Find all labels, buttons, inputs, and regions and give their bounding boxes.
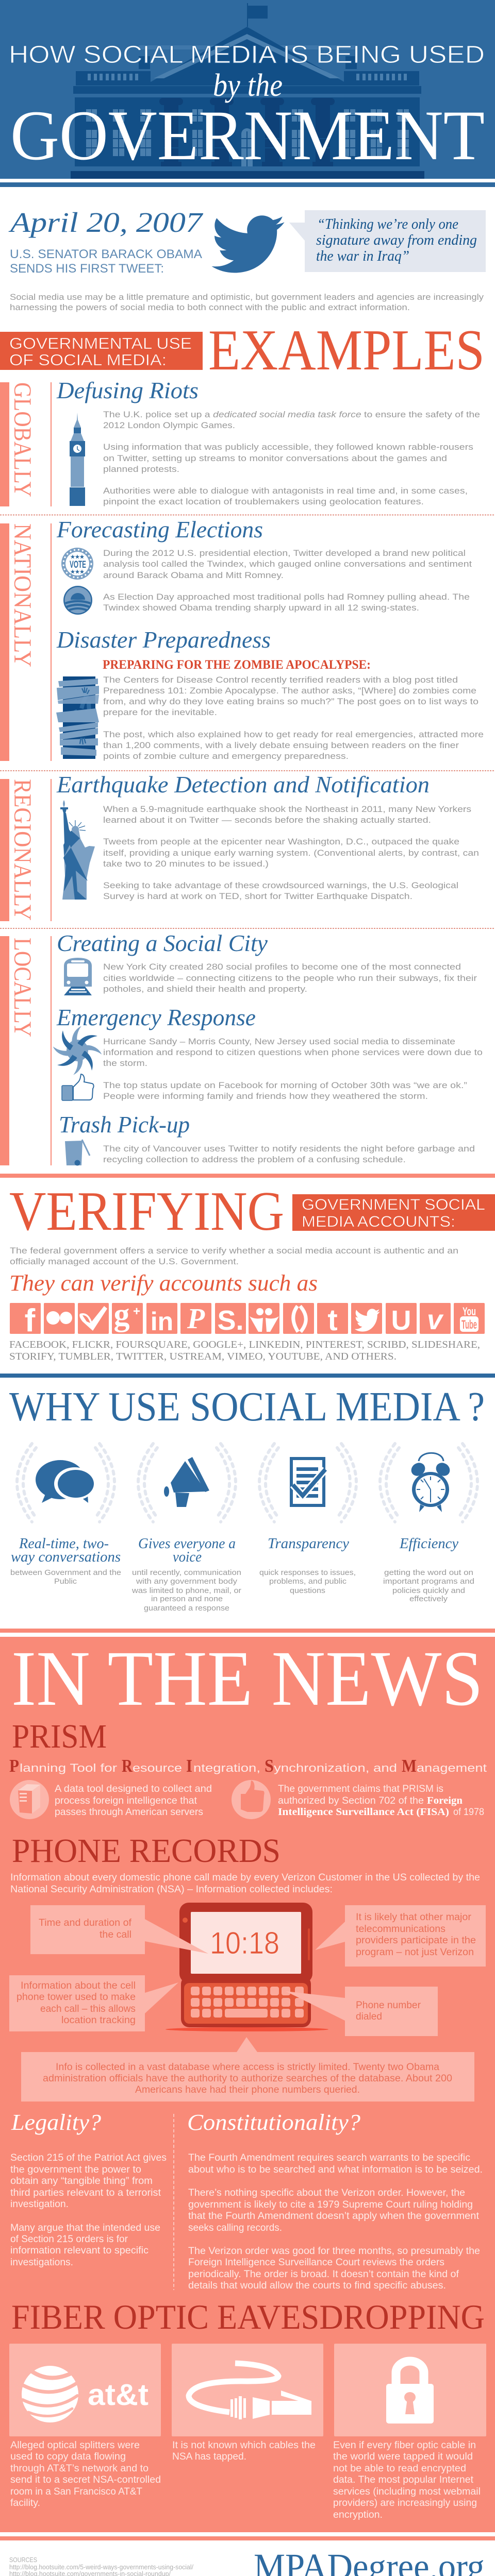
legality column: information relevant to specific bbox=[10, 2245, 148, 2256]
text block: cities worldwide – connecting citizens to the people who run their subways, fix their bbox=[103, 973, 477, 983]
icon: statue of liberty bbox=[60, 800, 95, 900]
icon: thumbs up bbox=[62, 1074, 94, 1100]
text block bbox=[10, 2440, 161, 2509]
heading: Creating a Social City bbox=[57, 930, 268, 956]
callout: other providers: providers participate in the bbox=[356, 1935, 476, 1946]
text block: information and respond to citizen questions when phone services were down due to bbox=[103, 1047, 483, 1057]
panel: at&t: at&t bbox=[88, 2378, 148, 2412]
icon: server bbox=[10, 1780, 49, 1819]
text block: Tweets from people at the epicenter near Washington, D.C., outpaced the quake bbox=[103, 837, 459, 846]
callout: cell tower: Information about the cell bbox=[21, 1980, 136, 1991]
verify description bbox=[10, 1246, 458, 1266]
heading: Transparency bbox=[268, 1536, 350, 1552]
panel: globally bbox=[0, 378, 480, 506]
icon: vote badge: VOTE bbox=[70, 560, 86, 570]
text block: People were informing family and friends how they weathered the storm. bbox=[103, 1091, 428, 1101]
section heading: verifying bbox=[9, 1181, 495, 1242]
callout: time and duration bbox=[30, 1905, 208, 1954]
description: important programs and bbox=[383, 1578, 474, 1586]
prism acronym: R bbox=[122, 1756, 133, 1776]
social networks list: STORIFY, TUMBLER, TWITTER, USTREAM, VIMEO, YOUTUBE, AND OTHERS. bbox=[9, 1351, 397, 1362]
heading: voice bbox=[173, 1549, 202, 1565]
icon: thumbs up bbox=[232, 1780, 271, 1819]
text block: encryption. bbox=[333, 2510, 383, 2520]
legality column: Section 215 of the Patriot Act gives bbox=[10, 2153, 167, 2163]
icon row: social networks: S. bbox=[217, 1305, 244, 1336]
panel: encryption bbox=[333, 2344, 486, 2520]
text block: The city of Vancouver uses Twitter to notify residents the night before garbage and bbox=[103, 1144, 475, 1154]
prism acronym: I bbox=[186, 1756, 192, 1776]
prism fact two: Foreign bbox=[427, 1795, 463, 1806]
callout: database bbox=[21, 2037, 474, 2102]
heading: Defusing Riots bbox=[56, 378, 199, 403]
legality column: obtain any “tangible thing” from bbox=[10, 2176, 153, 2187]
text block: Hurricane Sandy – Morris County, New Jersey used social media to disseminate bbox=[103, 1037, 455, 1046]
prism heading: PRISM bbox=[12, 1718, 107, 1755]
section heading: verifying: VERIFYING bbox=[9, 1181, 284, 1242]
description bbox=[10, 1569, 121, 1586]
callout: database: Americans have had their phone numbers queried. bbox=[135, 2084, 360, 2095]
intro paragraph bbox=[10, 292, 484, 312]
tweet intro: U.S. SENATOR BARACK OBAMA bbox=[10, 247, 202, 261]
description: getting the word out on bbox=[384, 1569, 473, 1577]
icon: vote badge: ★★★ bbox=[71, 569, 84, 575]
panel: locally bbox=[0, 930, 483, 1165]
laurel bbox=[138, 1444, 236, 1522]
icon row: social networks: f bbox=[25, 1303, 36, 1338]
laurel bbox=[380, 1444, 477, 1522]
panel: real-time conversations bbox=[10, 1444, 121, 1586]
constitutionality column: The Verizon order was good for three months, so presumably the bbox=[188, 2246, 480, 2257]
constitutionality column: The Fourth Amendment requires search warrants to be specific bbox=[188, 2153, 470, 2163]
icon row: social networks: g bbox=[113, 1297, 130, 1332]
icon row: social networks: v bbox=[427, 1304, 444, 1335]
icon: vote badge bbox=[61, 548, 93, 580]
description: until recently, communication bbox=[132, 1569, 241, 1577]
text block: points of zombie culture and emergency preparedness. bbox=[103, 751, 349, 761]
text block: learned about it on Twitter — seconds before the shaking actually started. bbox=[103, 815, 431, 825]
text block: send it to a secret NSA-controlled bbox=[10, 2475, 161, 2485]
panel: transparency bbox=[259, 1444, 356, 1595]
icon: checklist bbox=[290, 1457, 325, 1507]
text block bbox=[333, 2440, 481, 2520]
icon: boarded door with zombie bbox=[56, 676, 99, 759]
prism acronym: ynchronization, and bbox=[274, 1761, 397, 1774]
text block: pinpoint the exact location of troublemakers using geolocation features. bbox=[103, 497, 424, 506]
prism acronym: anagement bbox=[417, 1761, 487, 1774]
constitutionality column: seeks calling records. bbox=[188, 2223, 282, 2233]
heading: way conversations bbox=[11, 1549, 121, 1565]
text block: During the 2012 U.S. presidential election, Twitter developed a brand new political bbox=[103, 548, 466, 558]
description: questions bbox=[290, 1587, 325, 1595]
prism acronym: ntegration, bbox=[193, 1761, 260, 1774]
prism fact one: passes through American servers bbox=[55, 1807, 203, 1818]
sources: http://blog.hootsuite.com/5-weird-ways-governments-using-social/ bbox=[9, 2564, 194, 2571]
heading: Disaster Preparedness bbox=[56, 627, 271, 653]
heading bbox=[138, 1536, 236, 1565]
icon row: social networks bbox=[10, 1297, 485, 1338]
text block: The top status update on Facebook for morning of October 30th was “we are ok.” bbox=[103, 1080, 467, 1090]
callout: phone number bbox=[286, 1987, 438, 2036]
text block bbox=[103, 962, 477, 994]
quote callout: “Thinking we’re only one bbox=[317, 216, 458, 232]
section heading: examples: OF SOCIAL MEDIA: bbox=[9, 351, 167, 369]
icon: twitter bird bbox=[211, 215, 285, 273]
text block: facility. bbox=[10, 2498, 40, 2509]
text block: planned protests. bbox=[103, 464, 179, 474]
legality column: investigation. bbox=[10, 2199, 69, 2210]
icon: obama logo bbox=[63, 586, 92, 615]
icon row: social networks: P bbox=[187, 1303, 205, 1335]
verify description: The federal government offers a service to verify whether a social media account is authentic and an bbox=[10, 1246, 458, 1256]
callout: cell tower: location tracking bbox=[61, 2015, 136, 2026]
callout: other providers: It is likely that other major bbox=[356, 1912, 472, 1923]
prism acronym bbox=[9, 1756, 487, 1776]
text block: used to copy data flowing bbox=[10, 2451, 126, 2462]
icon: megaphone bbox=[164, 1457, 209, 1507]
constitutionality column: details that would allow the courts to find specific abuses. bbox=[188, 2280, 446, 2291]
callout: other providers: program – not just Verizon bbox=[356, 1947, 474, 1958]
legality column: of Section 215 orders is for bbox=[10, 2234, 128, 2245]
laurel bbox=[259, 1444, 356, 1522]
title: by the bbox=[213, 68, 283, 103]
description: quick responses to issues, bbox=[259, 1569, 356, 1577]
tweet intro: SENDS HIS FIRST TWEET: bbox=[10, 262, 164, 276]
text block: Survey is hard at work on TED, short for Twitter Earthquake Dispatch. bbox=[103, 891, 412, 901]
constitutionality column: Foreign Intelligence Surveillance Court reviews the orders bbox=[188, 2257, 444, 2268]
description: with any government body bbox=[136, 1578, 238, 1586]
heading: Gives everyone a bbox=[138, 1536, 236, 1552]
phone records intro bbox=[10, 1872, 480, 1895]
heading: Earthquake Detection and Notification bbox=[56, 772, 430, 798]
panel: in the news bbox=[0, 1635, 495, 2532]
sources: SOURCES bbox=[9, 2556, 37, 2564]
text block: potholes, and shield their health and property. bbox=[103, 984, 307, 994]
section heading: IN THE NEWS bbox=[11, 1635, 483, 1722]
text block: The Centers for Disease Control recently terrified readers with a blog post titled bbox=[103, 675, 458, 685]
prism fact two bbox=[278, 1784, 484, 1818]
text block: analysis tool called the Twindex, which gauged online conversations and sentiment bbox=[103, 559, 472, 569]
legality column bbox=[10, 2110, 167, 2268]
social networks list bbox=[9, 1339, 480, 1362]
heading bbox=[11, 1536, 121, 1565]
prism fact two: authorized by Section 702 of the bbox=[278, 1795, 424, 1806]
text block: New York City created 280 social profiles to become one of the most connected bbox=[103, 962, 461, 972]
icon row: social networks: + bbox=[133, 1304, 140, 1318]
text block: Seeking to take advantage of these crowdsourced warnings, the U.S. Geological bbox=[103, 880, 458, 890]
constitutionality column: periodically. The order is broad. It doesn’t contain the kind of bbox=[188, 2269, 459, 2280]
text block: Using information that was publicly accessible, they followed known rabble-rousers bbox=[103, 442, 473, 452]
text block bbox=[103, 1037, 483, 1101]
legality column: Many argue that the intended use bbox=[10, 2223, 160, 2233]
constitutionality column: Constitutionality? bbox=[187, 2110, 360, 2135]
phone records heading: PHONE RECORDS bbox=[12, 1832, 280, 1870]
text block: Authorities were able to dialogue with antagonists in real time and, in some cases, bbox=[103, 486, 468, 496]
icon: vote badge: ★★★ bbox=[71, 554, 84, 560]
prism acronym: lanning Tool for bbox=[20, 1761, 117, 1774]
description bbox=[131, 1569, 241, 1613]
phone illustration: 10:18 bbox=[210, 1926, 279, 1960]
text block: providers) are increasingly using bbox=[333, 2498, 477, 2509]
side label: GLOBALLY bbox=[9, 382, 36, 497]
text block: data. The most popular Internet bbox=[333, 2475, 474, 2485]
section heading: examples bbox=[0, 318, 485, 382]
text block: the world were tapped it would bbox=[333, 2451, 473, 2462]
legality column: Legality? bbox=[11, 2110, 101, 2135]
callout: other providers: telecommunications bbox=[356, 1924, 446, 1935]
description bbox=[383, 1569, 474, 1603]
icon: big ben bbox=[70, 413, 85, 506]
description: policies quickly and bbox=[392, 1587, 465, 1595]
prism acronym: esource bbox=[133, 1761, 182, 1774]
phone records intro: National Security Administration (NSA) – Information collected includes: bbox=[10, 1884, 333, 1895]
text block: around Barack Obama and Mitt Romney. bbox=[103, 570, 284, 580]
icon: train bbox=[64, 958, 92, 995]
prism acronym: S bbox=[265, 1756, 274, 1776]
icon row: social networks: in bbox=[151, 1307, 173, 1336]
description: problems, and public bbox=[269, 1578, 346, 1586]
description: in person and none bbox=[151, 1595, 223, 1603]
constitutionality column bbox=[187, 2110, 483, 2291]
social networks list: FACEBOOK, FLICKR, FOURSQUARE, GOOGLE+, LINKEDIN, PINTEREST, SCRIBD, SLIDESHARE, bbox=[9, 1339, 480, 1350]
section heading: verifying: MEDIA ACCOUNTS: bbox=[302, 1213, 455, 1230]
callout: time and duration: the call bbox=[100, 1929, 131, 1940]
text block: Alleged optical splitters were bbox=[10, 2440, 140, 2451]
section heading: verifying: GOVERNMENT SOCIAL bbox=[302, 1196, 485, 1213]
heading: Efficiency bbox=[399, 1536, 459, 1552]
text block: prepare for the inevitable. bbox=[103, 707, 217, 717]
icon row: social networks: You bbox=[463, 1305, 476, 1318]
quote callout bbox=[289, 210, 486, 272]
prism fact two: of 1978 bbox=[453, 1807, 484, 1818]
text block: As Election Day approached most traditional polls had Romney pulling ahead. The bbox=[103, 592, 470, 602]
text block bbox=[103, 804, 479, 901]
phone records intro: Information about every domestic phone call made by every Verizon Customer in the US collected by the bbox=[10, 1872, 480, 1883]
callout: phone number: dialed bbox=[356, 2011, 382, 2022]
prism fact one bbox=[55, 1784, 212, 1818]
panel: efficiency bbox=[380, 1444, 477, 1603]
text block: itself, providing a unique early warning system. (Conventional alerts, by contrast, can bbox=[103, 848, 479, 858]
subheading: PREPARING FOR THE ZOMBIE APOCALYPSE: bbox=[103, 658, 371, 672]
text block: not be able to read encrypted bbox=[333, 2463, 466, 2474]
side label: REGIONALLY bbox=[9, 779, 36, 921]
prism fact one: process foreign intelligence that bbox=[55, 1795, 197, 1806]
laurel bbox=[17, 1444, 114, 1522]
description: Public bbox=[54, 1578, 77, 1586]
heading: Real-time, two- bbox=[19, 1536, 109, 1552]
callout: database: Info is collected in a vast database where access is strictly limited. Twenty two Obama bbox=[56, 2062, 439, 2073]
quote callout: signature away from ending bbox=[316, 232, 477, 248]
prism fact two: The government claims that PRISM is bbox=[278, 1784, 443, 1794]
section heading: examples: GOVERNMENTAL USE bbox=[9, 334, 192, 352]
legality column: the government the power to bbox=[10, 2164, 141, 2175]
legality column: investigations. bbox=[10, 2257, 73, 2268]
text block: services (including most webmail bbox=[333, 2486, 481, 2497]
constitutionality column: government is likely to cite a 1979 Supreme Court ruling holding bbox=[188, 2199, 473, 2210]
callout: cell tower: phone tower used to make bbox=[16, 1992, 136, 2003]
quote callout: the war in Iraq” bbox=[316, 248, 409, 264]
text block bbox=[103, 1144, 475, 1164]
callout: cell tower bbox=[9, 1975, 178, 2031]
text block: Twindex showed Obama trending sharply upward in all 12 swing-states. bbox=[103, 603, 419, 613]
panel: nationally bbox=[0, 517, 484, 761]
text block: take two to 20 minutes to be issued.) bbox=[103, 859, 269, 869]
callout: database: administration officials have the authority to authorize searches of the database. About 200 bbox=[43, 2073, 452, 2084]
panel: regionally bbox=[0, 772, 479, 921]
title bbox=[9, 41, 485, 175]
icon: alarm clock bbox=[409, 1453, 452, 1512]
date heading: April 20, 2007 bbox=[8, 207, 204, 238]
icon row: social networks: t bbox=[327, 1303, 338, 1337]
icon: trash bin bbox=[65, 1140, 90, 1165]
description: between Government and the bbox=[10, 1569, 121, 1577]
text block: from, and why do they love eating brains so much?” The post goes on to list ways to bbox=[103, 697, 478, 706]
text block: When a 5.9-magnitude earthquake shook the Northeast in 2011, many New Yorkers bbox=[103, 804, 471, 814]
subheading: they can verify: They can verify accounts such as bbox=[9, 1270, 318, 1296]
text block: the storm. bbox=[103, 1058, 147, 1068]
legality column: third parties relevant to a terrorist bbox=[10, 2188, 161, 2198]
text block bbox=[103, 548, 472, 613]
prism acronym: M bbox=[402, 1756, 417, 1776]
panel: at&t bbox=[9, 2344, 161, 2509]
description: effectively bbox=[409, 1595, 448, 1603]
icon row: social networks: U bbox=[391, 1305, 411, 1336]
icon: government building bbox=[71, 3, 424, 179]
text block bbox=[172, 2440, 316, 2462]
text block: The U.K. police set up a dedicated social media task force to ensure the safety of the bbox=[103, 410, 480, 419]
description: was limited to phone, mail, or bbox=[131, 1587, 241, 1595]
text block bbox=[103, 675, 484, 761]
text block: The post, which also explained how to get ready for real emergencies, attracted more bbox=[103, 730, 484, 739]
intro paragraph: harnessing the powers of social media to both connect with the public and extract information. bbox=[10, 302, 410, 312]
intro paragraph: Social media use may be a little premature and optimistic, but government leaders and agencies are increasingly bbox=[10, 292, 484, 302]
text block: than 1,200 comments, with a lively debate ensuing between readers on the finer bbox=[103, 740, 459, 750]
heading: Trash Pick-up bbox=[59, 1112, 190, 1138]
text block: on Twitter, setting up streams to monitor conversations about the games and bbox=[103, 453, 447, 463]
tweet intro bbox=[10, 247, 202, 276]
description bbox=[259, 1569, 356, 1595]
sources bbox=[9, 2556, 210, 2576]
text block: NSA has tapped. bbox=[172, 2451, 246, 2462]
icon: at&t globe bbox=[22, 2366, 78, 2422]
text block bbox=[103, 410, 480, 506]
title: GOVERNMENT bbox=[10, 96, 485, 175]
prism acronym: P bbox=[9, 1756, 19, 1776]
text block: through AT&T’s network and to bbox=[10, 2463, 148, 2474]
icon: speech bubbles bbox=[36, 1460, 95, 1503]
icon: padlock bbox=[386, 2361, 434, 2424]
verify description: officially managed account of the U.S. Government. bbox=[10, 1257, 239, 1266]
description: guaranteed a response bbox=[144, 1604, 229, 1613]
text block: It is not known which cables the bbox=[172, 2440, 316, 2451]
text block: recycling collection to address the problem of a confusing schedule. bbox=[103, 1155, 406, 1164]
text block: 2012 London Olympic Games. bbox=[103, 420, 235, 430]
panel: gives everyone a voice bbox=[131, 1444, 241, 1613]
heading: Emergency Response bbox=[56, 1005, 256, 1030]
constitutionality column: There’s nothing specific about the Verizon order. However, the bbox=[188, 2188, 465, 2198]
phone illustration bbox=[166, 1903, 328, 2031]
heading: Forecasting Elections bbox=[56, 517, 263, 543]
prism fact two: Intelligence Surveillance Act (FISA) bbox=[278, 1806, 449, 1818]
constitutionality column: that the Fourth Amendment doesn’t apply when the government bbox=[188, 2211, 480, 2222]
constitutionality column: about who is to be searched and what information is to be seized. bbox=[188, 2164, 483, 2175]
header panel bbox=[0, 0, 495, 187]
icon: fiber cable bbox=[189, 2363, 311, 2419]
panel: first tweet bbox=[8, 207, 486, 312]
text block: room in a San Francisco AT&T bbox=[10, 2486, 142, 2497]
icon: hurricane bbox=[52, 1025, 103, 1076]
icon row: social networks: Tube bbox=[461, 1318, 477, 1332]
text block: Preparedness 101: Zombie Apocalypse. The author asks, “[Where] do zombies come bbox=[103, 686, 476, 696]
callout: other providers bbox=[315, 1905, 486, 1967]
callout: phone number: Phone number bbox=[356, 2000, 421, 2011]
callout: time and duration: Time and duration of bbox=[39, 1918, 132, 1928]
title: HOW SOCIAL MEDIA IS BEING USED bbox=[9, 41, 485, 69]
callout: cell tower: each call – this allows bbox=[40, 2004, 136, 2014]
side label: LOCALLY bbox=[9, 938, 36, 1037]
panel: cables bbox=[172, 2344, 323, 2462]
text block: Even if every fiber optic cable in bbox=[333, 2440, 476, 2451]
side label: NATIONALLY bbox=[9, 523, 36, 667]
prism fact one: A data tool designed to collect and bbox=[55, 1784, 212, 1794]
